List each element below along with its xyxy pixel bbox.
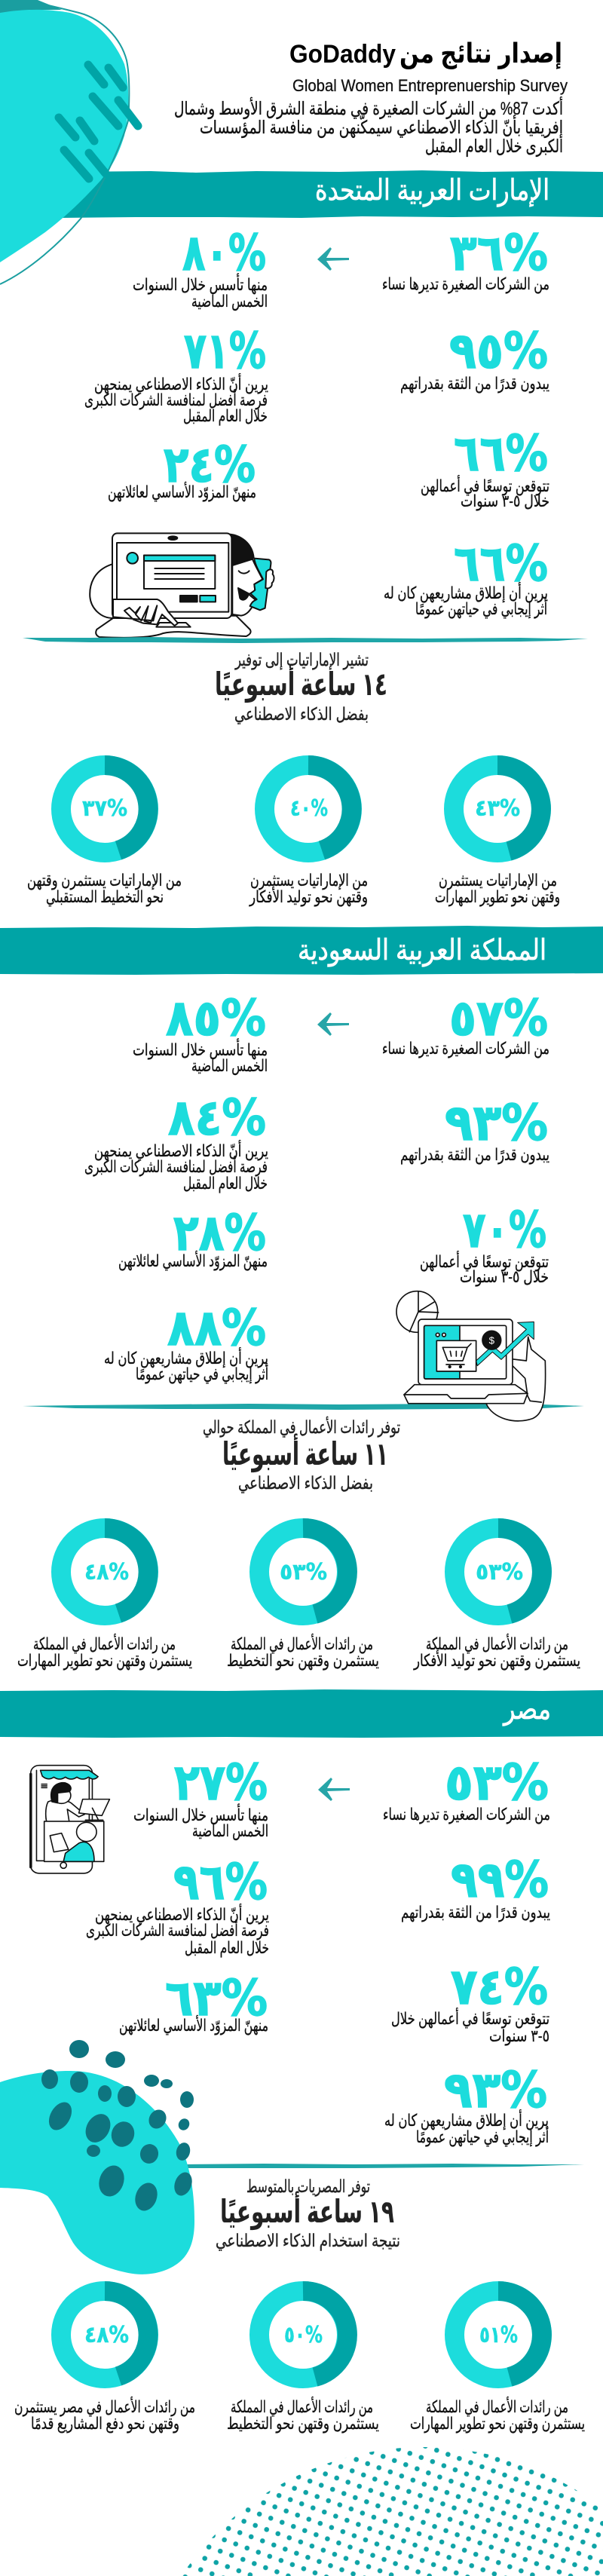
stat: 63%: ٦٣%	[165, 1969, 268, 2027]
stat: 27%: منها تأسس خلال السنوات	[133, 1803, 268, 1825]
stat: 93%: ٩٣%	[445, 1094, 548, 1152]
donut: 53% planning: ٥٣%	[280, 1559, 327, 1585]
donut: 40%: ٤٠%	[290, 795, 328, 822]
stat: 70%: ٧٠%	[463, 1201, 546, 1259]
stat: 93%: يبدون قدرًا من الثقة بقدراتهم	[400, 1145, 549, 1165]
stat: 96%: يرين أنّ الذكاء الاصطناعي يمنحهن	[95, 1904, 269, 1925]
donut: 48% skills: من رائدات الأعمال في المملكة	[33, 1634, 176, 1654]
stat: 80%: ٨٠%	[182, 224, 266, 282]
stat: 28%: منهنّ المزوّد الأساسي لعائلاتهن	[118, 1251, 268, 1271]
stat: 85%: منها تأسس خلال السنوات	[133, 1038, 268, 1060]
intro paragraph	[174, 96, 563, 157]
donut: 43%: ٤٣%	[475, 795, 520, 822]
donut: 48%	[14, 2291, 195, 2433]
donut: 37%: من الإماراتيات يستثمرن وقتهن	[27, 871, 182, 890]
illustration: laptop with shopping cart and growth arrow	[396, 1291, 546, 1421]
section band: Egypt: مصر	[502, 1694, 551, 1726]
donut: 50%	[227, 2291, 379, 2433]
heading: Saudi hours saved	[203, 1417, 400, 1493]
stat: 66% impact: أثر إيجابي في حياتهن عمومًا	[415, 598, 547, 619]
stat: 74%	[391, 1958, 549, 2045]
stat: 84%: خلال العام المقبل	[183, 1174, 268, 1193]
illustration: phone storefront	[31, 1766, 109, 1873]
illustration: laptop with shopping cart and growth arrow: $	[489, 1334, 495, 1346]
stat: 96%: ٩٦%	[173, 1853, 268, 1911]
stat: 63%	[119, 1969, 268, 2035]
donut: 37%: ٣٧%	[82, 795, 127, 822]
stat: 85%: ٨٥%	[166, 989, 266, 1047]
heading: Egypt hours saved: نتيجة استخدام الذكاء الاصطناعي	[216, 2231, 400, 2251]
title: إصدار نتائج من	[399, 38, 562, 69]
arrow	[318, 1778, 350, 1801]
stat: 71%: ٧١%	[184, 322, 266, 380]
heading: Saudi hours saved: بفضل الذكاء الاصطناعي	[238, 1473, 373, 1493]
donut: 50%: ٥٠%	[284, 2322, 323, 2348]
stat: 24%	[108, 436, 256, 502]
stat: 93%	[384, 2061, 549, 2147]
stat: 70%: خلال ٥-٣ سنوات	[460, 1267, 549, 1286]
stat: 85%	[133, 989, 268, 1076]
stat: 66% impact: يرين أن إطلاق مشاريعهن كان له	[384, 582, 548, 603]
title: GoDaddy	[289, 40, 396, 69]
donut: 51%	[410, 2291, 585, 2433]
header: title and intro	[174, 38, 568, 157]
stat: 57%: ٥٧%	[449, 989, 548, 1047]
stat: 88%: يرين أن إطلاق مشاريعهن كان له	[104, 1347, 268, 1368]
stat: 28%	[118, 1204, 268, 1271]
donut: 53% ideas	[413, 1528, 580, 1670]
donut: 48% skills: يستثمرن وقتهن نحو تطوير المهارات	[17, 1651, 192, 1670]
stat: 80%	[133, 224, 268, 311]
stat: 74%: تتوقعن توسعًا في أعمالهن خلال	[391, 2008, 549, 2029]
stat: 93%: أثر إيجابي في حياتهن عمومًا	[416, 2126, 549, 2147]
heading: UAE hours saved: ١٤ ساعة أسبوعيًا	[215, 663, 387, 703]
donut: 53% planning: يستثمرن وقتهن نحو التخطيط	[227, 1651, 379, 1670]
stat: 24%: منهنّ المزوّد الأساسي لعائلاتهن	[108, 482, 256, 502]
stat: 66% expansion: ٦٦%	[454, 424, 548, 482]
stat: 24%: ٢٤%	[164, 436, 256, 494]
stat: 63%: منهنّ المزوّد الأساسي لعائلاتهن	[119, 2015, 268, 2035]
stat: 28%: ٢٨%	[173, 1204, 266, 1262]
heading: Egypt hours saved: توفر المصريات بالمتوسط	[246, 2176, 370, 2197]
stat: 99%: يبدون قدرًا من الثقة بقدراتهم	[401, 1903, 550, 1922]
stat: 95%: يبدون قدرًا من الثقة بقدراتهم	[400, 374, 549, 394]
stat: 96%: فرصة أفضل لمنافسة الشركات الكبرى	[86, 1919, 269, 1940]
heading: Egypt hours saved: ١٩ ساعة أسبوعيًا	[220, 2191, 394, 2231]
stat: 27%: الخمس الماضية	[192, 1821, 268, 1841]
stat: 71%: يرين أنّ الذكاء الاصطناعي يمنحهن	[94, 373, 268, 394]
panel: UAE	[23, 170, 603, 907]
donut: 37%	[27, 765, 182, 907]
stat: 88%: أثر إيجابي في حياتهن عمومًا	[136, 1363, 268, 1384]
subtitle: Global Women Entreprenuership Survey	[292, 76, 568, 95]
stat: 66% expansion: خلال ٥-٣ سنوات	[461, 492, 549, 510]
intro paragraph: أكدت 87% من الشركات الصغيرة في منطقة الشرق الأوسط وشمال	[174, 96, 563, 119]
brush divider	[23, 637, 588, 643]
stat: 88%: ٨٨%	[167, 1299, 266, 1357]
donut: 48%: ٤٨%	[84, 2322, 129, 2348]
stat: 70%	[420, 1201, 549, 1286]
stat: 84%: فرصة أفضل لمنافسة الشركات الكبرى	[84, 1156, 268, 1176]
donut: 53% planning: من رائدات الأعمال في المملكة	[231, 1634, 373, 1654]
section band: Egypt	[0, 1689, 603, 1738]
stat: 36%	[382, 224, 549, 293]
stat: 71%: خلال العام المقبل	[183, 406, 268, 425]
stat: 99%: ٩٩%	[451, 1851, 549, 1909]
stat: 84%: ٨٤%	[168, 1089, 266, 1147]
stat: 27%	[133, 1754, 268, 1841]
section band: UAE	[60, 170, 603, 218]
heading: UAE hours saved: تشير الإماراتيات إلى توفير	[234, 650, 369, 670]
heading: UAE hours saved: بفضل الذكاء الاصطناعي	[234, 704, 369, 724]
stat: 84%	[84, 1089, 268, 1193]
arrow	[317, 1012, 349, 1036]
donut: 43%	[435, 765, 560, 906]
stat: 93%	[400, 1094, 549, 1165]
stat: 96%	[86, 1853, 269, 1957]
donut: 53% planning	[227, 1528, 379, 1670]
stat: 93%: ٩٣%	[444, 2061, 547, 2119]
heading: Egypt hours saved	[216, 2176, 400, 2251]
stat: 53%: ٥٣%	[445, 1754, 549, 1812]
brush divider	[23, 1404, 584, 1410]
donut: 48%: من رائدات الأعمال في مصر يستثمرن	[14, 2397, 195, 2417]
stat: 71%	[84, 322, 268, 425]
panel: Saudi Arabia	[0, 926, 603, 1670]
stat: 70%: تتوقعن توسعًا في أعمالهن	[420, 1251, 549, 1272]
stat: 74%: ٥-٣ سنوات	[489, 2026, 549, 2045]
heading: Saudi hours saved: ١١ ساعة أسبوعيًا	[222, 1433, 388, 1473]
decorative blob with dots	[0, 2040, 195, 2274]
stat: 88%	[104, 1299, 268, 1384]
donut: 48% skills	[17, 1528, 192, 1670]
donut: 48%: وقتهن نحو دفع المشاريع قدمًا	[31, 2414, 179, 2433]
arrow	[317, 247, 349, 271]
decorative blob: top left	[0, 0, 138, 284]
donut: 37%: نحو التخطيط المستقبلي	[46, 887, 164, 907]
stat: 96%: خلال العام المقبل	[185, 1938, 269, 1957]
donut: 40%: من الإماراتيات يستثمرن	[250, 871, 368, 890]
heading: Saudi hours saved: توفر رائدات الأعمال في المملكة حوالي	[203, 1417, 400, 1438]
stat: 84%: يرين أنّ الذكاء الاصطناعي يمنحهن	[94, 1140, 268, 1161]
stat: 57%	[382, 989, 549, 1058]
decorative halftone dots	[182, 2447, 603, 2576]
illustration: woman behind laptop with phone	[90, 533, 274, 638]
stat: 53%	[383, 1754, 550, 1824]
donut: 48% skills: ٤٨%	[84, 1559, 129, 1585]
stat: 85%: الخمس الماضية	[191, 1056, 268, 1076]
donut: 50%: يستثمرن وقتهن نحو التخطيط	[227, 2414, 379, 2433]
stat: 66% expansion	[421, 424, 549, 510]
donut: 51%: ٥١%	[479, 2322, 518, 2348]
brush divider	[185, 2164, 584, 2168]
heading: UAE hours saved	[215, 650, 387, 724]
section band: Saudi Arabia: المملكة العربية السعودية	[298, 935, 546, 967]
stat: 74%: ٧٤%	[451, 1958, 548, 2016]
stat: 80%: منها تأسس خلال السنوات	[133, 273, 268, 295]
donut: 53% ideas: ٥٣%	[476, 1559, 523, 1585]
donut: 40%	[249, 765, 368, 906]
stat: 66% expansion: تتوقعن توسعًا في أعمالهن	[421, 475, 549, 496]
stat: 95%: ٩٥%	[449, 322, 548, 380]
stat: 27%: ٢٧%	[174, 1754, 268, 1812]
stat: 99%	[401, 1851, 550, 1922]
donut: 43%: من الإماراتيات يستثمرن	[439, 871, 557, 890]
stat: 93%: يرين أن إطلاق مشاريعهن كان له	[384, 2109, 549, 2130]
section band: Saudi Arabia	[0, 926, 603, 975]
donut: 40%: وقتهن نحو توليد الأفكار	[249, 887, 368, 906]
stat: 71%: فرصة أفضل لمنافسة الشركات الكبرى	[84, 389, 268, 409]
section band: UAE: الإمارات العربية المتحدة	[315, 175, 549, 207]
stat: 36%: ٣٦%	[450, 224, 548, 282]
stat: 66% impact: ٦٦%	[454, 534, 548, 593]
stat: 95%	[400, 322, 549, 394]
title	[289, 38, 562, 69]
stat: 80%: الخمس الماضية	[191, 292, 268, 311]
donut: 50%: من رائدات الأعمال في المملكة	[231, 2397, 373, 2417]
panel: Egypt	[0, 1689, 603, 2433]
stat: 66% impact	[384, 534, 548, 619]
